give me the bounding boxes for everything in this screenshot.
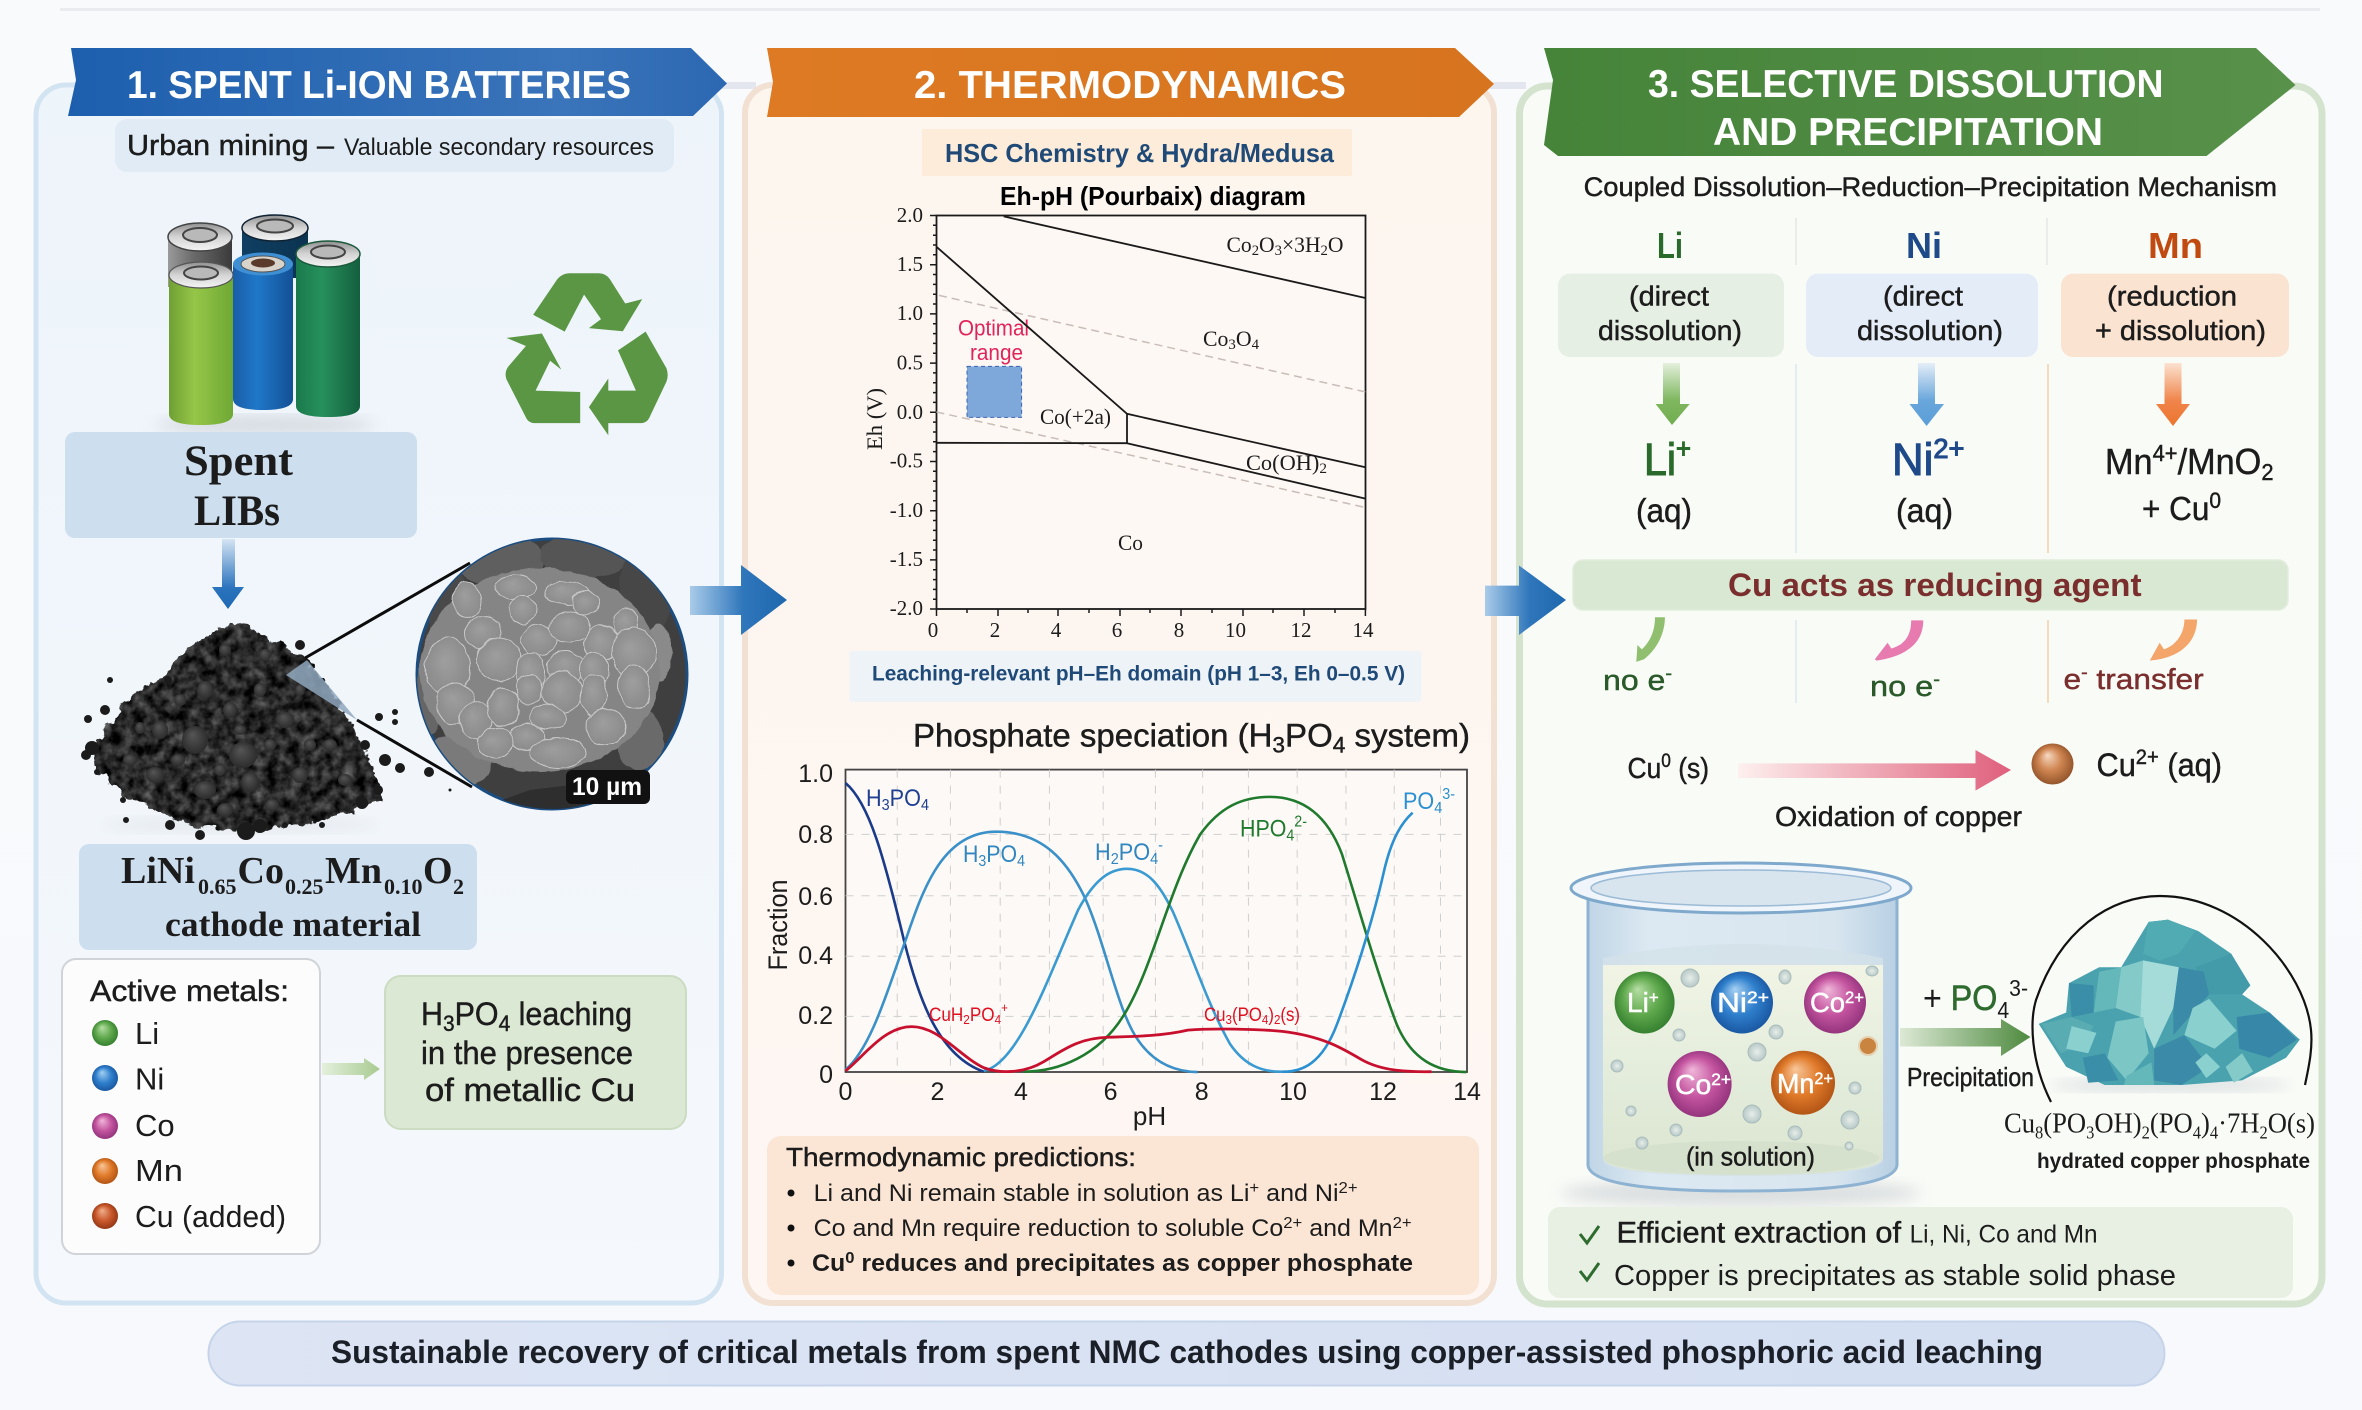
series labels: PO: [970, 1005, 995, 1026]
label: plus phosphate: 4: [1997, 997, 2009, 1023]
x axis tick labels: [839, 1078, 1481, 1106]
panel 1 background: [36, 85, 722, 1303]
x axis tick labels: 12: [1369, 1078, 1397, 1106]
software label: [922, 129, 1352, 176]
series labels: 4: [1150, 851, 1158, 868]
y axis tick labels: [798, 760, 833, 1089]
series labels: CuH: [929, 1005, 967, 1026]
formula: hydrated copper phosphate: 3: [2086, 1122, 2094, 1142]
x axis tick labels: 10: [1225, 618, 1246, 642]
callout: thermodynamic predictions: 2+: [1393, 1215, 1412, 1232]
electron labels: -: [1933, 669, 1940, 689]
y axis tick labels: 1.0: [798, 760, 833, 788]
cell: blue: [233, 252, 293, 410]
subtitle pill: urban mining: Urban mining –: [127, 130, 335, 162]
callout: thermodynamic predictions: [767, 1136, 1479, 1295]
column: Mn: 4+: [2153, 440, 2178, 466]
series labels: H: [963, 841, 980, 868]
ion: Co2+: [1804, 972, 1866, 1034]
column: Ni: (direct: [1883, 281, 1963, 312]
series labels: 3: [882, 797, 890, 814]
formula: hydrated copper phosphate: ): [2201, 1108, 2210, 1140]
series labels: 2: [1274, 1012, 1280, 1027]
y axis tick labels: 0: [819, 1061, 833, 1089]
phase labels: O: [1236, 326, 1252, 351]
electron labels: -: [2081, 662, 2088, 682]
series labels: 4: [1017, 853, 1025, 870]
x axis tick labels: 0: [928, 618, 938, 642]
x axis tick labels: 0: [839, 1078, 852, 1106]
y axis tick labels: 0.4: [798, 942, 833, 970]
reaction: copper oxidation: Cu: [1628, 753, 1665, 785]
column: Li: (aq): [1636, 492, 1692, 529]
callout lines: powder to micrograph: [305, 563, 472, 787]
phase labels: Co: [1118, 530, 1143, 555]
electron labels: no e: [1870, 671, 1926, 703]
column: Mn: + dissolution): [2095, 315, 2266, 346]
callout: outcomes checklist: Copper is precipitates as stable solid phase: [1614, 1260, 2176, 1292]
footer banner: [208, 1322, 2164, 1386]
label box: cathode material formula: 0.25: [285, 874, 324, 899]
callout: outcomes checklist: [1548, 1207, 2293, 1298]
y axis tick labels: -1.5: [890, 547, 923, 571]
callout: thermodynamic predictions: 2+: [1339, 1180, 1358, 1197]
column: Li: dissolution): [1598, 315, 1742, 346]
arrow: precipitation: [1900, 1019, 2030, 1056]
formula: hydrated copper phosphate: 8: [2035, 1122, 2043, 1142]
arrow: oxidation: [1738, 750, 2011, 791]
callout: thermodynamic predictions: 0: [845, 1250, 855, 1267]
ion: Li+: [1615, 972, 1675, 1034]
series labels: PO: [1403, 788, 1438, 815]
column: Ni: [1806, 225, 2038, 529]
column: Ni: 2+: [1933, 433, 1964, 464]
icon: check: [1580, 1263, 1599, 1280]
optimal range marker: range: [970, 340, 1023, 365]
reaction: copper oxidation: 0: [1661, 751, 1671, 772]
series labels: [866, 785, 1455, 1027]
curve: H2PO4-: [984, 869, 1282, 1072]
chart: Eh-pH Pourbaix diagram: [862, 181, 1374, 642]
label box: spent LIBs: [65, 432, 417, 538]
label box: cathode material formula: 0.65: [198, 874, 236, 899]
reaction: copper oxidation: 2+: [2136, 746, 2159, 769]
y axis title: Eh (V): [862, 388, 887, 450]
y axis tick labels: 0.5: [897, 350, 923, 374]
callout: H3PO4 leaching: leaching: [510, 996, 632, 1032]
arrow: panel 2 to panel 3: [1485, 566, 1566, 635]
icon: recycling symbol: [506, 273, 668, 435]
chart title: Eh-pH (Pourbaix) diagram: [1000, 181, 1306, 211]
arrow: Ni dissolution: [1910, 363, 1944, 426]
column: Ni: dissolution): [1857, 315, 2003, 346]
callout: thermodynamic predictions: +: [1249, 1180, 1259, 1197]
y axis tick labels: 0.8: [798, 821, 833, 849]
y axis tick labels: -2.0: [890, 596, 923, 620]
legend item: Li: Li: [135, 1016, 159, 1051]
series labels: 2: [1111, 851, 1119, 868]
phase labels: O: [1328, 232, 1344, 257]
legend item: Mn: [92, 1153, 183, 1188]
cell: grey: [168, 223, 232, 287]
legend item: Li: [92, 1016, 159, 1051]
column: Mn: 0: [2209, 488, 2221, 513]
label box: cathode material formula: [79, 844, 477, 950]
series labels: 4: [921, 797, 929, 814]
arrow: Mn reduction: [2156, 363, 2190, 426]
y axis title: Fraction: [763, 880, 793, 970]
series labels: 4: [995, 1012, 1001, 1027]
column: Li: Li: [1644, 434, 1679, 485]
panel 2: thermodynamics: [745, 48, 1494, 1303]
column: Li: [1558, 225, 1784, 529]
panel 3: selective dissolution and precipitation: [1520, 48, 2322, 1304]
legend: active metals: Active metals:: [90, 975, 289, 1008]
banner: Cu acts as reducing agent: Cu acts as reducing agent: [1728, 567, 2142, 603]
series labels: 2-: [1294, 813, 1307, 830]
x axis tick labels: 6: [1112, 618, 1122, 642]
phase labels: 3: [1228, 337, 1236, 353]
series labels: ): [1268, 1005, 1274, 1026]
phase labels: 2: [1252, 243, 1259, 259]
panel 2 background: [745, 85, 1494, 1303]
legend: active metals: [62, 959, 320, 1254]
series labels: 2: [963, 1012, 970, 1027]
illustration: copper phosphate crystals: [2033, 896, 2311, 1102]
chart title: 3: [1272, 733, 1285, 758]
phase labels: Co(OH): [1246, 450, 1318, 475]
legend item: Ni: [92, 1062, 164, 1096]
y axis tick labels: [890, 203, 923, 620]
electron labels: [1603, 662, 2204, 703]
y axis tick labels: -1.0: [890, 498, 923, 522]
column: Mn: Mn: [2148, 225, 2203, 266]
column: Ni: Ni: [1892, 434, 1934, 485]
ion: Li+: +: [1649, 988, 1659, 1007]
column: Ni: Ni: [1906, 225, 1942, 266]
x axis tick labels: 8: [1195, 1078, 1209, 1106]
x axis tick labels: 14: [1352, 618, 1374, 642]
chart title: 4: [1333, 733, 1345, 758]
panel 3 header ribbon: 3. SELECTIVE DISSOLUTION: [1648, 63, 2164, 106]
series labels: Cu: [1204, 1005, 1228, 1026]
x axis tick labels: 2: [931, 1078, 944, 1106]
chart: phosphate speciation: [763, 718, 1481, 1131]
legend item: Ni: Ni: [135, 1062, 164, 1096]
formula: hydrated copper phosphate: 4: [2193, 1122, 2201, 1142]
label box: spent LIBs: Spent: [184, 438, 294, 485]
icon: check: [1580, 1226, 1599, 1243]
bubbles: [1611, 966, 1878, 1150]
icon: battery cells: [155, 215, 375, 435]
column: Mn: 2: [2261, 459, 2274, 485]
panel 3 header ribbon: AND PRECIPITATION: [1713, 111, 2103, 154]
phase labels: Co: [1203, 326, 1229, 351]
series labels: HPO: [1240, 815, 1292, 842]
callout: H3PO4 leaching: 3: [443, 1011, 455, 1036]
callout: thermodynamic predictions: Cu: [812, 1250, 844, 1277]
ion: Mn2+: 2+: [1814, 1069, 1833, 1088]
chart title: PO: [1285, 718, 1333, 754]
column: Mn: (reduction: [2107, 281, 2237, 312]
x axis tick labels: 2: [990, 618, 1000, 642]
electron labels: no e: [1603, 665, 1659, 697]
label: plus phosphate: 3-: [2009, 975, 2028, 1001]
curve: HPO4 2-: [1024, 797, 1466, 1072]
curve: H3PO4 dark: [845, 783, 984, 1072]
caption: leaching domain: Leaching-relevant pH–Eh domain (pH 1–3, Eh 0–0.5 V): [872, 663, 1405, 686]
column: Mn: Mn: [2105, 441, 2155, 482]
panel 3 background: [1520, 86, 2322, 1304]
column: Li: (direct: [1629, 281, 1709, 312]
callout: thermodynamic predictions: Co and Mn require reduction to soluble Co: [814, 1215, 1265, 1242]
software label: HSC Chemistry & Hydra/Medusa: [945, 138, 1335, 168]
subtitle pill: urban mining: Valuable secondary resources: [344, 134, 654, 161]
curve: PO4 3-: [1282, 813, 1413, 1072]
reaction: copper oxidation: (s): [1671, 753, 1709, 785]
callout: H3PO4 leaching: H: [421, 996, 444, 1032]
y axis tick labels: 1.5: [897, 252, 923, 276]
phase labels: 3: [1275, 243, 1282, 259]
chart title: Phosphate speciation (H: [913, 718, 1262, 754]
ion: Co2+: 2+: [1845, 988, 1864, 1007]
cell: dark green: [296, 241, 360, 417]
phase labels: O: [1259, 232, 1275, 257]
legend item: Mn: Mn: [135, 1153, 183, 1188]
column: Mn: [2061, 225, 2289, 527]
image: SEM micrograph with scale bar: [414, 531, 687, 815]
arrow: batteries to powder: [212, 539, 244, 609]
formula: hydrated copper phosphate: 2: [2142, 1122, 2150, 1142]
phase labels: 4: [1252, 337, 1259, 353]
curve: copper species: [845, 1027, 1432, 1072]
image: black cathode powder pile: [81, 622, 452, 840]
x axis tick labels: 14: [1453, 1078, 1481, 1106]
subtitle pill: urban mining: [115, 119, 674, 172]
curve: H3PO4 light: [845, 832, 1198, 1072]
series labels: -: [1158, 837, 1163, 854]
panel 2 header ribbon: [767, 48, 1494, 117]
label box: cathode material formula: O: [423, 850, 453, 892]
legend item: Co: Co: [135, 1108, 175, 1143]
image: SEM micrograph with scale bar: 10 µm: [572, 773, 642, 801]
phase labels: Co: [1226, 232, 1252, 257]
optimal range marker: Optimal: [958, 316, 1029, 341]
series labels: PO: [890, 785, 921, 812]
series labels: 4: [1286, 827, 1294, 844]
label box: cathode material formula: cathode material: [165, 905, 421, 944]
y axis tick labels: 0.2: [798, 1002, 833, 1030]
electron labels: transfer: [2088, 664, 2204, 696]
legend item: Co: [92, 1108, 175, 1143]
y axis tick labels: 0.6: [798, 883, 833, 911]
footer banner: Sustainable recovery of critical metals from spent NMC cathodes using copper-assisted phosphoric acid leaching: [331, 1334, 2043, 1370]
label box: spent LIBs: LIBs: [194, 488, 280, 535]
callout: thermodynamic predictions: reduces and precipitates as copper phosphate: [855, 1250, 1413, 1277]
ion: Mn2+: [1771, 1051, 1835, 1115]
mechanism subtitle: Coupled Dissolution–Reduction–Precipitation Mechanism: [1584, 172, 2277, 202]
series labels: H: [866, 785, 883, 812]
ion: Ni2+: Ni: [1717, 987, 1743, 1018]
series labels: (s): [1280, 1005, 1300, 1026]
chart title: system): [1345, 718, 1470, 754]
illustration: beaker with dissolved ions: (in solution): [1686, 1142, 1815, 1172]
series labels: 4: [1262, 1012, 1268, 1027]
column: Mn: + Cu: [2142, 490, 2213, 527]
x axis tick labels: [928, 618, 1374, 642]
electron labels: -: [1665, 663, 1672, 683]
callout: H3PO4 leaching: [385, 976, 686, 1129]
ion: Li+: Li: [1627, 987, 1649, 1018]
column: Mn: /MnO: [2178, 441, 2261, 482]
callout: outcomes checklist: Efficient extraction of: [1616, 1217, 1902, 1250]
formula: hydrated copper phosphate: (PO: [2043, 1108, 2086, 1140]
label box: cathode material formula: 0.10: [384, 874, 422, 899]
x axis tick labels: 8: [1174, 618, 1184, 642]
x axis title: pH: [1133, 1101, 1166, 1131]
callout: H3PO4 leaching: in the presence: [421, 1035, 633, 1071]
callout: outcomes checklist: Li, Ni, Co and Mn: [1910, 1221, 2098, 1249]
arrow: metals to leaching: [322, 1058, 380, 1080]
column: Li: +: [1676, 433, 1691, 464]
series labels: (PO: [1232, 1005, 1262, 1026]
series labels: 3: [978, 853, 986, 870]
callout: thermodynamic predictions: and Ni: [1259, 1180, 1339, 1207]
phase labels: ×3H: [1282, 232, 1321, 257]
series labels: +: [1001, 1000, 1008, 1015]
x axis tick labels: 4: [1051, 618, 1062, 642]
label box: cathode material formula: 2: [453, 874, 464, 899]
phase labels: 2: [1319, 461, 1327, 477]
phase labels: 2: [1321, 243, 1328, 259]
series labels: 4: [1434, 800, 1442, 817]
y axis tick labels: 1.0: [897, 301, 923, 325]
formula: hydrated copper phosphate: ·7H: [2218, 1108, 2260, 1140]
formula: hydrated copper phosphate: OH): [2094, 1108, 2142, 1140]
series labels: 3-: [1442, 786, 1455, 803]
phase labels: [1040, 232, 1344, 555]
ion: Co2+: Co: [1810, 987, 1846, 1018]
column: Ni: (aq): [1896, 492, 1953, 529]
electron transfer arrows: [1636, 617, 2197, 662]
label box: cathode material formula: Mn: [325, 850, 382, 892]
optimal range marker: [958, 316, 1029, 417]
x axis tick labels: 4: [1014, 1078, 1028, 1106]
ion: Ni2+: 2+: [1747, 988, 1769, 1007]
arrow: Ni no electrons: [1875, 620, 1923, 661]
label: plus phosphate: + PO: [1923, 979, 2001, 1018]
panel 2 header ribbon: 2. THERMODYNAMICS: [914, 64, 1346, 107]
formula: hydrated copper phosphate: 4: [2210, 1122, 2218, 1142]
reaction: copper oxidation: Cu: [2096, 747, 2137, 783]
ion: Mn2+: Mn: [1777, 1068, 1816, 1099]
column: Li: Li: [1657, 225, 1683, 266]
panel 1 header ribbon: [68, 48, 727, 116]
formula: hydrated copper phosphate: hydrated copper phosphate: [2037, 1150, 2310, 1173]
arrow: panel 1 to panel 2: [690, 565, 787, 635]
x axis tick labels: 6: [1104, 1078, 1118, 1106]
y axis tick labels: 0.0: [897, 400, 923, 424]
formula: hydrated copper phosphate: Cu: [2004, 1108, 2038, 1140]
ion: Ni2+: [1711, 972, 1773, 1034]
ion: Co2+ second: Co: [1675, 1069, 1711, 1100]
arrow: Li dissolution: [1656, 363, 1690, 425]
label: precipitation: Precipitation: [1907, 1062, 2034, 1092]
ion: Co2+ second: 2+: [1711, 1070, 1731, 1089]
label box: cathode material formula: Co: [238, 850, 284, 892]
reaction: copper oxidation: (aq): [2159, 747, 2222, 783]
arrow: Li no electrons: [1636, 617, 1665, 662]
panel 3 header ribbon: [1544, 48, 2296, 156]
legend item: Cu added: Cu (added): [135, 1199, 286, 1234]
y axis tick labels: -0.5: [890, 448, 923, 472]
reaction: copper oxidation: [1628, 744, 2222, 832]
beaker rim: [1571, 863, 1911, 913]
y axis tick labels: 2.0: [897, 203, 923, 227]
series labels: H: [1095, 839, 1112, 866]
formula: hydrated copper phosphate: (PO: [2150, 1108, 2193, 1140]
caption: leaching domain: [850, 651, 1422, 702]
formula: hydrated copper phosphate: 2: [2259, 1122, 2268, 1142]
x axis tick labels: 12: [1290, 618, 1312, 642]
cell: lime green: [169, 262, 233, 425]
arrow: Mn electron transfer: [2150, 620, 2197, 661]
panel 1 header ribbon: 1. SPENT Li-ION BATTERIES: [127, 64, 631, 107]
formula: hydrated copper phosphate: [2004, 1108, 2315, 1173]
zoom wedge: [286, 660, 357, 720]
electron labels: e: [2064, 664, 2080, 696]
callout: thermodynamic predictions: Thermodynamic predictions:: [786, 1142, 1136, 1172]
callout: thermodynamic predictions: and Mn: [1302, 1215, 1393, 1242]
panel 1: spent Li-ion batteries: [36, 48, 727, 1303]
label box: cathode material formula: LiNi: [121, 850, 195, 892]
series labels: 3: [1226, 1012, 1232, 1027]
illustration: beaker with dissolved ions: [1561, 863, 1921, 1207]
x axis tick labels: 10: [1279, 1078, 1307, 1106]
callout: H3PO4 leaching: 4: [499, 1011, 510, 1036]
series labels: PO: [986, 841, 1017, 868]
callout: thermodynamic predictions: Li and Ni remain stable in solution as Li: [814, 1180, 1231, 1207]
callout: H3PO4 leaching: PO: [455, 996, 499, 1032]
phase labels: Co(+2a): [1040, 404, 1111, 429]
callout: thermodynamic predictions: 2+: [1283, 1215, 1302, 1232]
icon: copper ball: [2032, 744, 2074, 784]
reaction: copper oxidation: Oxidation of copper: [1775, 801, 2022, 832]
banner: Cu acts as reducing agent: [1573, 560, 2288, 610]
cell: navy: [242, 215, 308, 278]
callout: H3PO4 leaching: of metallic Cu: [425, 1072, 635, 1108]
series labels: PO: [1119, 839, 1150, 866]
formula: hydrated copper phosphate: O(s): [2268, 1108, 2315, 1140]
ion: Co2+ second: [1668, 1051, 1732, 1117]
